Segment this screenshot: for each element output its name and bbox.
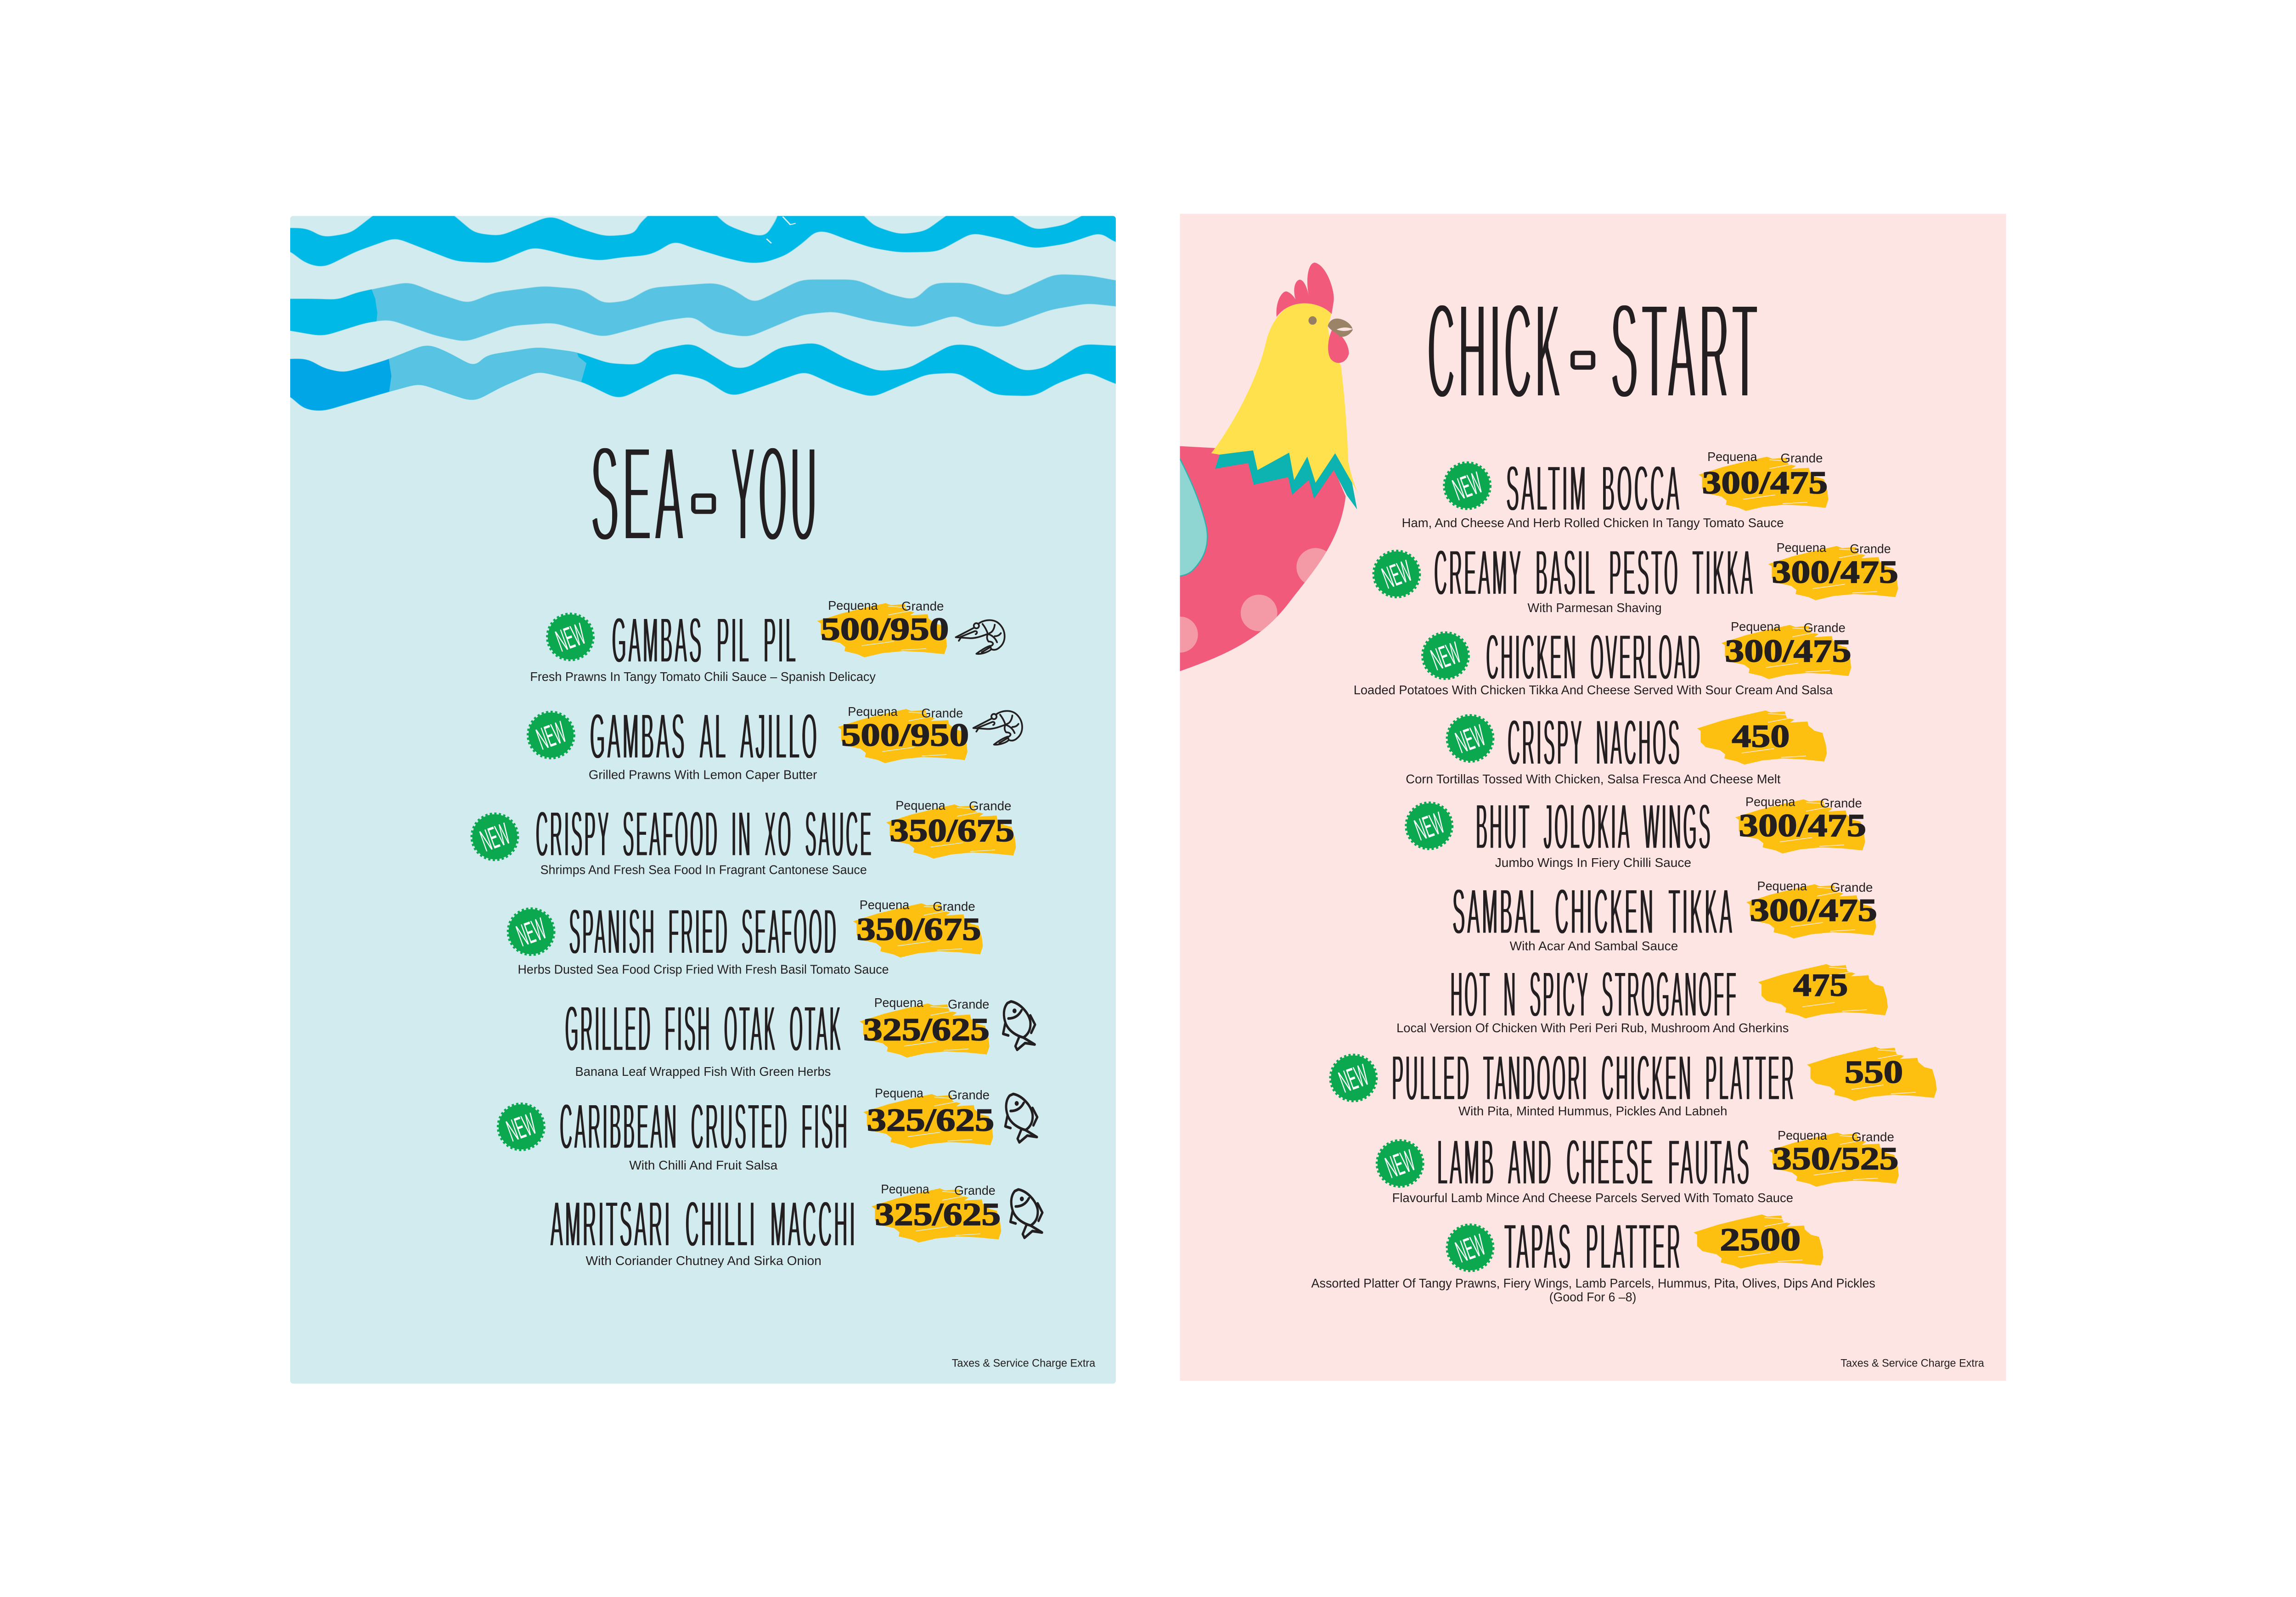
size label small: Pequena (1757, 879, 1807, 893)
menu item: pulled tandoori chicken platter (1330, 1042, 1936, 1118)
footnote: Taxes & Service Charge Extra (952, 1357, 1096, 1369)
panel: sea-you (263, 207, 1142, 1383)
panel: sea-you: AMRITSARI CHILLI MACCHI (551, 1188, 857, 1260)
menu item: hot n spicy stroganoff (1396, 958, 1888, 1035)
size label small: Pequena (874, 995, 924, 1010)
price brush (838, 709, 968, 763)
price brush (817, 603, 947, 657)
price: 475 (1793, 967, 1848, 1003)
size label large: Grande (921, 706, 963, 720)
description: Ham, And Cheese And Herb Rolled Chicken In Tangy Tomato Sauce (1402, 516, 1784, 530)
menu item: gambas pil pil (530, 598, 1005, 684)
description: Shrimps And Fresh Sea Food In Fragrant Cantonese Sauce (540, 863, 867, 877)
price brush (860, 1003, 990, 1057)
price: 450 (1732, 718, 1790, 754)
panel: sea-you: GRILLED FISH OTAK OTAK (565, 992, 843, 1064)
menu item: caribbean crusted fish (498, 1086, 1037, 1172)
price: 300/475 (1725, 633, 1851, 669)
size label large: Grande (954, 1183, 996, 1198)
price brush (1722, 625, 1851, 679)
description: Loaded Potatoes With Chicken Tikka And Cheese Served With Sour Cream And Salsa (1354, 683, 1833, 697)
size label large: Grande (1851, 1130, 1894, 1144)
price: 2500 (1720, 1222, 1801, 1258)
menu item: saltim bocca: SALTIM BOCCA (1506, 452, 1682, 524)
size label small: Pequena (1745, 794, 1795, 809)
price: 325/625 (875, 1197, 1001, 1232)
price: 300/475 (1772, 554, 1898, 590)
size label small: Pequena (1778, 1128, 1827, 1142)
new badge: NEW (1452, 1227, 1489, 1269)
price brush (1735, 799, 1865, 854)
new badge: NEW (1452, 718, 1489, 760)
panel: chick-start (1162, 214, 2006, 1381)
description: Local Version Of Chicken With Peri Peri Rub, Mushroom And Gherkins (1396, 1021, 1789, 1035)
heading: chick-start: CHICK (1428, 275, 1564, 427)
size label small: Pequena (881, 1182, 929, 1196)
new badge: NEW (1335, 1057, 1373, 1100)
new badge: NEW (1427, 635, 1465, 677)
description: Jumbo Wings In Fiery Chilli Sauce (1495, 855, 1691, 870)
new badge (528, 712, 574, 758)
price: 350/675 (890, 813, 1014, 849)
menu item: gambas al ajillo (528, 700, 1022, 782)
price brush (1694, 1215, 1823, 1269)
menu item: bhut jolokia wings (1406, 790, 1866, 870)
icon: fish (1003, 1001, 1035, 1050)
icon: fish (1005, 1094, 1037, 1142)
price: 300/475 (1702, 465, 1828, 501)
new badge (1447, 1225, 1493, 1271)
new badge: NEW (512, 911, 550, 953)
new badge (508, 909, 554, 955)
new badge: NEW (551, 617, 590, 658)
menu item: tapas platter: TAPAS PLATTER (1504, 1210, 1683, 1282)
price brush (863, 1094, 993, 1148)
size label small: Pequena (1777, 540, 1827, 555)
panel: chick-start: CHICKEN OVERLOAD (1486, 621, 1702, 693)
new badge (1444, 462, 1491, 509)
description: With Coriander Chutney And Sirka Onion (586, 1254, 822, 1268)
menu item: grilled fish otak otak (565, 992, 1035, 1079)
new badge (1423, 633, 1469, 679)
new badge (498, 1104, 544, 1150)
description (1311, 1276, 1875, 1304)
panel background (290, 216, 1116, 1383)
price: 300/475 (1750, 893, 1877, 928)
price: 300/475 (1739, 808, 1866, 843)
panel background (1180, 214, 2006, 1381)
size label small: Pequena (1731, 619, 1781, 634)
illustration: blue waves (263, 207, 1142, 410)
new badge (1447, 715, 1493, 761)
description: Grilled Prawns With Lemon Caper Butter (589, 767, 817, 782)
price brush (853, 903, 983, 957)
menu item: spanish fried seafood (508, 895, 983, 977)
price: 550 (1845, 1054, 1903, 1090)
size label large: Grande (969, 799, 1011, 813)
description: With Parmesan Shaving (1528, 601, 1662, 615)
size label large: Grande (1830, 880, 1873, 894)
description: With Pita, Minted Hummus, Pickles And Labneh (1458, 1104, 1727, 1118)
size label large: Grande (948, 1088, 990, 1102)
new badge (1330, 1055, 1377, 1101)
size label large: Grande (1850, 542, 1891, 556)
menu item: gambas pil pil: GAMBAS PIL PIL (612, 604, 798, 676)
panel: sea-you: YOU (731, 417, 820, 569)
description: Herbs Dusted Sea Food Crisp Fried With Fresh Basil Tomato Sauce (518, 962, 889, 977)
menu item: lamb and cheese fautas (1377, 1126, 1899, 1205)
size label large: Grande (1804, 620, 1846, 635)
description: Corn Tortillas Tossed With Chicken, Salsa Fresca And Cheese Melt (1406, 772, 1781, 786)
price: 350/525 (1773, 1141, 1899, 1177)
size label large: Grande (948, 997, 989, 1011)
menu item: amritsari chilli macchi (551, 1182, 1042, 1268)
price: 500/950 (841, 717, 969, 753)
new badge: NEW (502, 1107, 540, 1148)
price brush (1768, 546, 1898, 600)
size label small: Pequena (848, 704, 898, 719)
new badge (1406, 803, 1452, 849)
price: 350/675 (856, 911, 981, 947)
price brush (1769, 1133, 1899, 1187)
price brush (1807, 1047, 1936, 1101)
icon: shrimp (974, 711, 1022, 745)
size label large: Grande (1820, 796, 1862, 810)
size label small: Pequena (860, 898, 910, 912)
new badge: NEW (1378, 554, 1416, 596)
new badge (472, 814, 518, 860)
price brush (1699, 457, 1829, 511)
icon: fish (1010, 1189, 1042, 1238)
panel: sea-you: SPANISH FRIED SEAFOOD (569, 895, 838, 967)
new badge: NEW (532, 714, 570, 757)
description: Flavourful Lamb Mince And Cheese Parcels Served With Tomato Sauce (1392, 1191, 1793, 1205)
new badge (1373, 551, 1420, 597)
new badge: NEW (1381, 1143, 1419, 1185)
price brush (1758, 964, 1888, 1018)
illustration: rooster (1162, 263, 1358, 671)
description: Banana Leaf Wrapped Fish With Green Herbs (575, 1064, 831, 1079)
price: 325/625 (863, 1012, 990, 1047)
size label small: Pequena (828, 598, 878, 613)
panel: chick-start: CRISPY NACHOS (1508, 706, 1682, 778)
new badge (547, 614, 593, 660)
icon: shrimp (956, 620, 1005, 654)
new badge (1377, 1140, 1423, 1187)
menu item: sambal chicken tikka (1452, 875, 1877, 953)
panel: chick-start: START (1611, 275, 1761, 427)
size label small: Pequena (895, 798, 945, 812)
description: Fresh Prawns In Tangy Tomato Chili Sauce – Spanish Delicacy (530, 669, 876, 684)
new badge: NEW (1448, 465, 1486, 507)
heading: chick-start (1428, 275, 1761, 427)
size label large: Grande (901, 599, 944, 613)
menu item: saltim bocca (1402, 450, 1829, 530)
size label small: Pequena (1707, 450, 1757, 464)
price brush (886, 804, 1016, 859)
panel: sea-you: CARIBBEAN CRUSTED FISH (560, 1090, 850, 1162)
price: 325/625 (867, 1102, 994, 1138)
menu item: creamy basil pesto tikka (1373, 536, 1898, 615)
footnote: Taxes & Service Charge Extra (1840, 1357, 1985, 1369)
heading: sea-you: SEA (591, 417, 687, 569)
size label large: Grande (933, 899, 975, 913)
description: Assorted Platter Of Tangy Prawns, Fiery Wings, Lamb Parcels, Hummus, Pita, Olives, Dips And Pickles (1311, 1276, 1875, 1290)
size label large: Grande (1781, 451, 1823, 465)
description: (Good For 6 –8) (1549, 1290, 1636, 1304)
price: 500/950 (821, 611, 949, 647)
price brush (1746, 884, 1876, 939)
new badge: NEW (476, 816, 514, 858)
description: With Chilli And Fruit Salsa (629, 1158, 778, 1172)
menu item: crispy seafood in xo sauce (472, 798, 1016, 877)
menu item: crispy nachos (1406, 706, 1827, 786)
text: CRISPY SEAFOOD IN XO SAUCE (536, 798, 873, 870)
price brush (1697, 710, 1827, 765)
menu item: tapas platter (1311, 1210, 1875, 1304)
menu item: gambas al ajillo: GAMBAS AL AJILLO (590, 700, 819, 772)
price brush (872, 1188, 1001, 1243)
size label small: Pequena (875, 1086, 924, 1100)
menu item: chicken overload (1354, 619, 1851, 697)
new badge: NEW (1410, 805, 1448, 847)
description: With Acar And Sambal Sauce (1510, 939, 1678, 953)
